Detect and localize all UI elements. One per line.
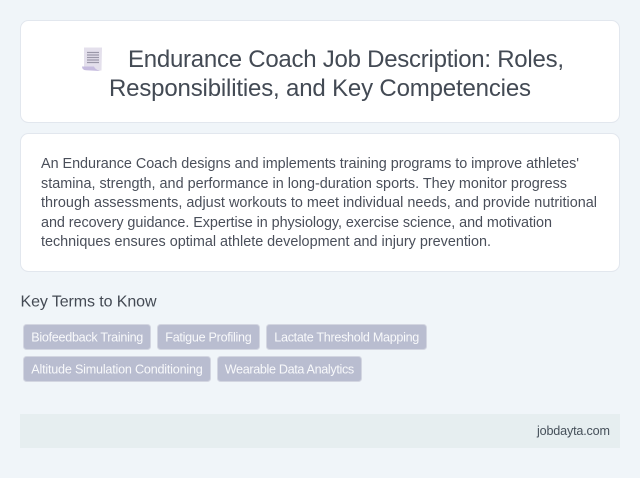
icon: document scroll: [82, 48, 102, 71]
text block: description: through assessments, adjust workouts to meet individual needs, and provide nutritional: [41, 195, 597, 211]
tag: Lactate Threshold Mapping: Lactate Threshold Mapping: [274, 331, 419, 345]
tag: Wearable Data Analytics: [218, 356, 362, 382]
tag: Lactate Threshold Mapping: [266, 324, 426, 350]
text block: description: An Endurance Coach designs and implements training programs to improve athletes': [41, 156, 579, 172]
text block: description: and recovery guidance. Expertise in physiology, exercise science, and motivation: [41, 215, 552, 231]
panel: header: [20, 20, 620, 122]
tag: Altitude Simulation Conditioning: [24, 356, 210, 382]
tag: Fatigue Profiling: Fatigue Profiling: [165, 331, 252, 345]
text block: description: stamina, strength, and performance in long-duration sports. They monitor progress: [41, 176, 567, 192]
tag: Biofeedback Training: [24, 324, 150, 350]
title: [109, 46, 564, 102]
title: Endurance Coach Job Description: Roles,: [128, 46, 564, 73]
footer: [20, 414, 620, 448]
text block: description: [41, 156, 597, 250]
tag: Fatigue Profiling: [158, 324, 260, 350]
heading: key terms: Key Terms to Know: [20, 294, 157, 311]
panel: description: [20, 134, 620, 272]
tag: Altitude Simulation Conditioning: Altitude Simulation Conditioning: [31, 362, 203, 376]
tag: Biofeedback Training: Biofeedback Training: [31, 331, 143, 345]
text block: description: techniques ensures optimal athlete development and injury prevention.: [41, 234, 491, 250]
footer: jobdayta.com: [536, 424, 610, 438]
tag: Wearable Data Analytics: Wearable Data Analytics: [225, 362, 354, 376]
title: Responsibilities, and Key Competencies: [109, 75, 531, 102]
